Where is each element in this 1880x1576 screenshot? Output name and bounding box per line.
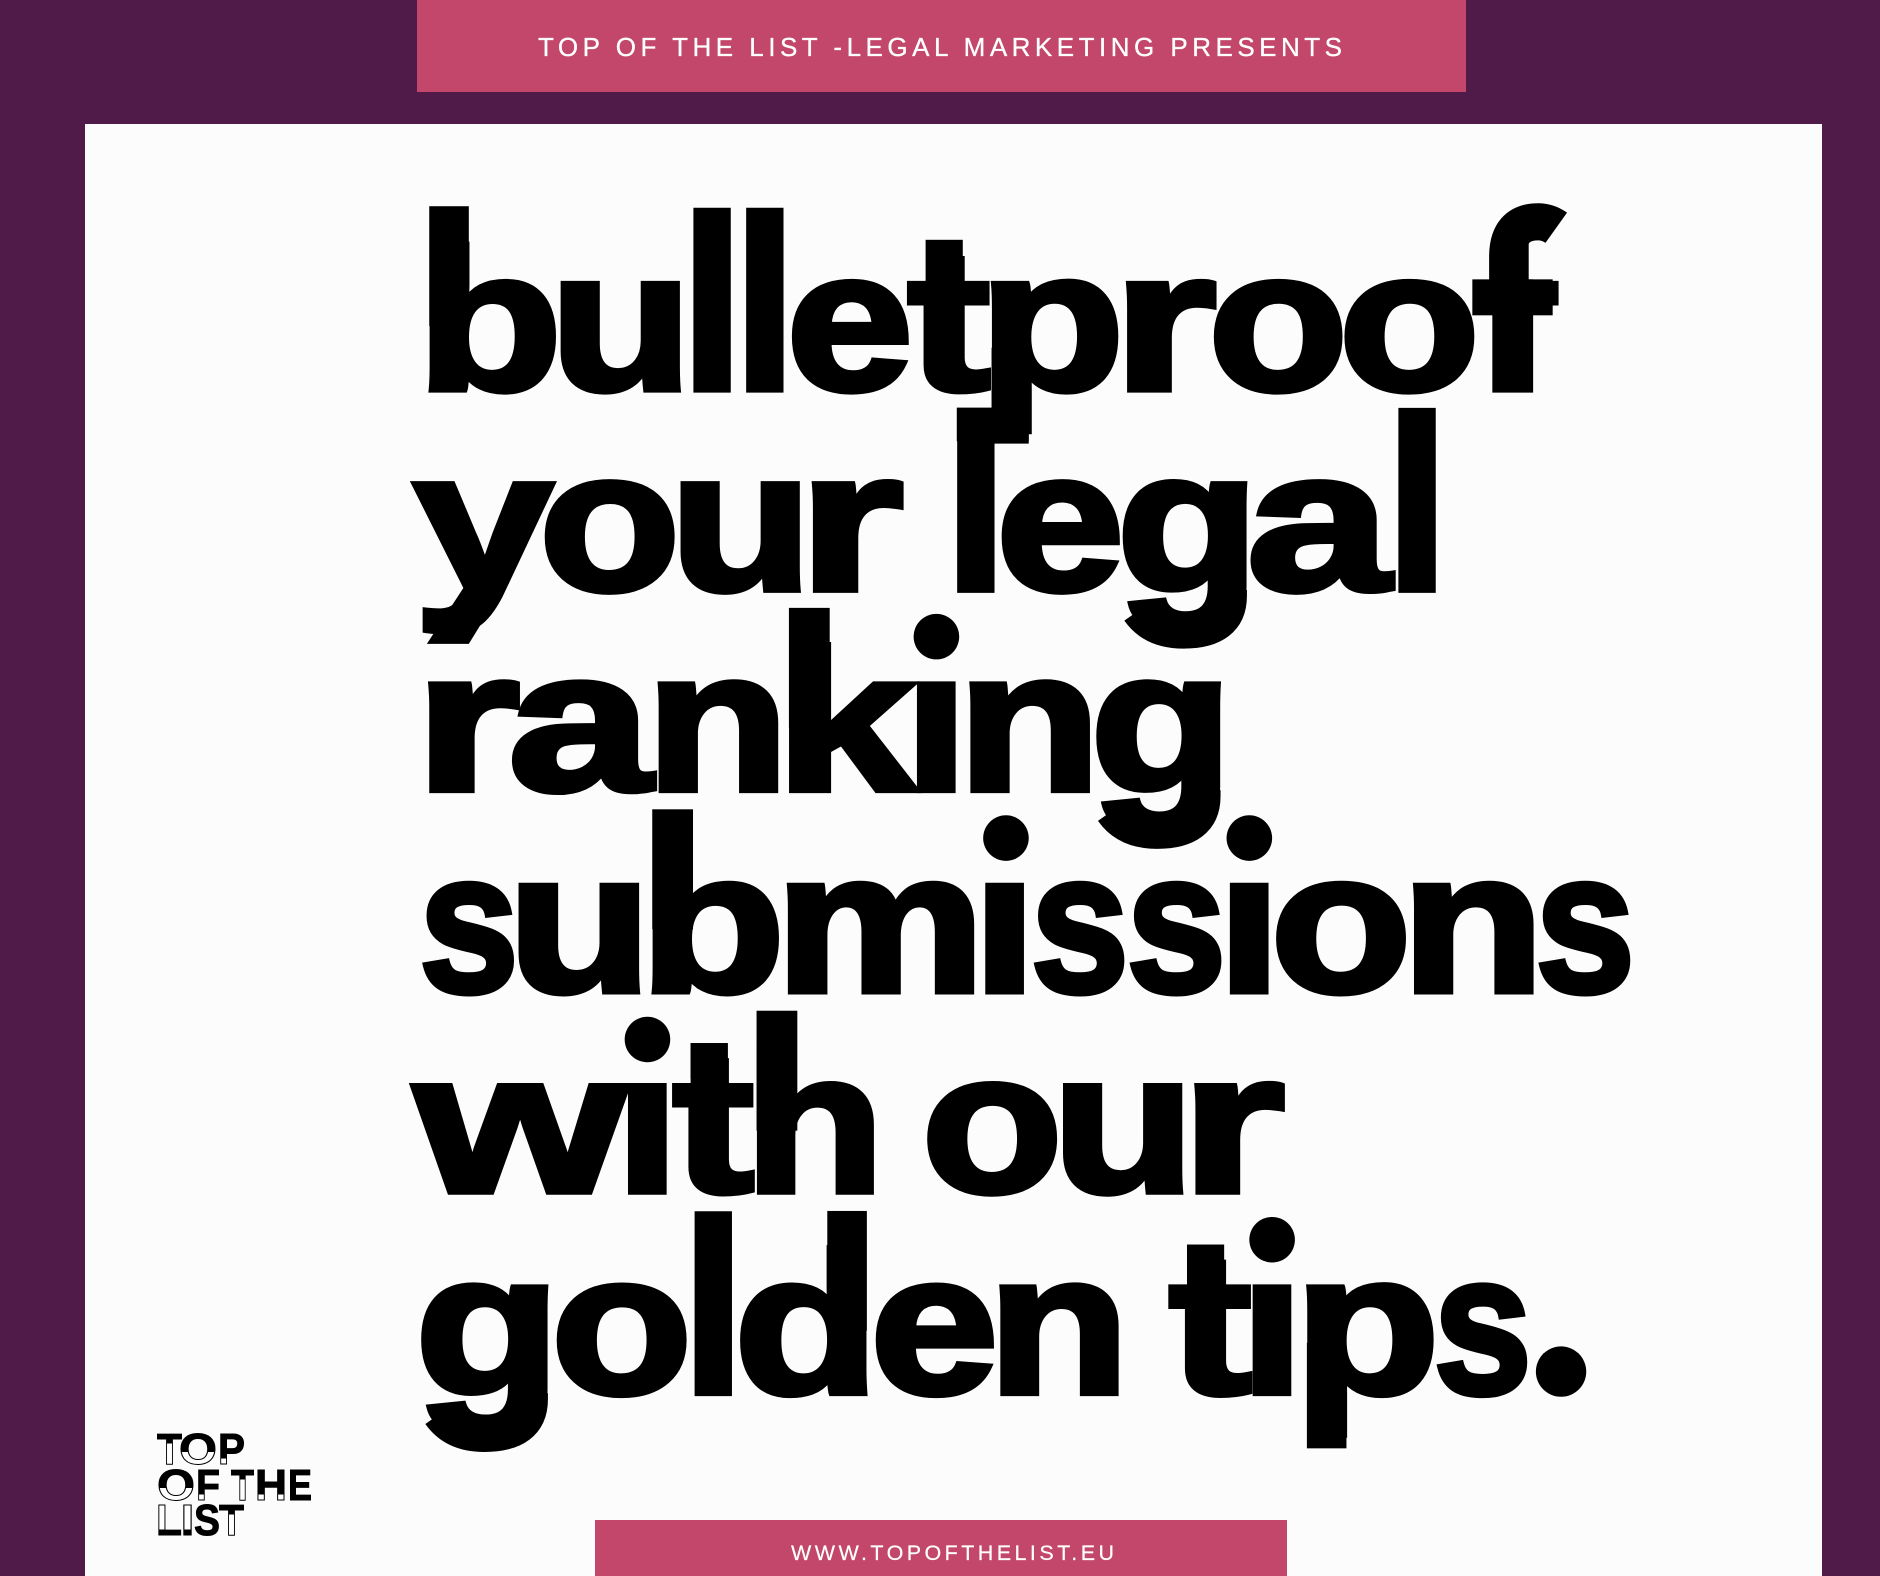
heading line: golden tips.: o <box>551 1213 692 1436</box>
heading line: ranking: n <box>646 610 789 833</box>
heading line: golden tips.: d <box>734 1213 880 1436</box>
heading line: submissions: b <box>640 812 785 1035</box>
heading line: your legal: e <box>996 410 1124 633</box>
heading line: ranking: n <box>958 610 1101 833</box>
heading line: bulletproof: o <box>1339 210 1480 433</box>
panel: top banner <box>417 0 1466 92</box>
heading line: submissions: i <box>1217 812 1281 1035</box>
heading line: submissions: n <box>1401 812 1545 1035</box>
heading line: bulletproof: b <box>417 210 562 433</box>
top banner text: TOP OF THE LIST -LEGAL MARKETING PRESENTS <box>538 32 1342 62</box>
logo line: LIST: S <box>194 1496 220 1545</box>
heading line: with our <box>413 1011 1285 1235</box>
heading line: your legal: a <box>1247 410 1392 633</box>
heading line: submissions: i <box>973 812 1037 1035</box>
panel: bottom banner <box>595 1520 1287 1576</box>
heading line: your legal: g <box>1117 410 1259 633</box>
logo line: OF THE: H <box>255 1461 287 1510</box>
heading line: ranking: a <box>508 610 654 833</box>
logo line: TOP: T <box>157 1425 182 1474</box>
heading line: golden tips.: s <box>1434 1213 1532 1436</box>
heading line: golden tips. <box>415 1170 1590 1448</box>
heading line: your legal: y <box>413 410 553 633</box>
heading line: bulletproof: e <box>786 210 913 433</box>
heading line: submissions: s <box>419 812 519 1035</box>
heading line: submissions <box>419 809 1635 1035</box>
logo line: LIST: T <box>219 1496 244 1545</box>
logo: Top of the List <box>156 1425 312 1545</box>
heading line: your legal <box>413 367 1449 644</box>
logo line: OF THE: T <box>231 1461 254 1510</box>
logo line: LIST: I <box>180 1496 194 1545</box>
heading line: bulletproof: l <box>733 167 797 443</box>
heading line: ranking: i <box>904 610 969 833</box>
heading line: with our: u <box>1052 1012 1195 1235</box>
logo line: TOP: O <box>179 1425 217 1474</box>
heading line: with our: o <box>922 1012 1063 1235</box>
heading line: with our: i <box>615 1012 680 1235</box>
heading line: your legal: l <box>944 367 1008 643</box>
heading line: submissions: o <box>1271 812 1412 1035</box>
logo line: OF THE: O <box>157 1461 195 1510</box>
heading line: golden tips.: p <box>1294 1213 1440 1436</box>
heading line: submissions: m <box>775 812 985 1035</box>
heading line: submissions: s <box>1031 812 1129 1035</box>
heading line: submissions: s <box>1127 812 1226 1035</box>
heading line: bulletproof: u <box>550 210 693 433</box>
heading line: bulletproof: o <box>1208 210 1348 433</box>
heading line: your legal: u <box>670 410 813 633</box>
heading line: ranking: r <box>414 610 520 833</box>
heading line: bulletproof: f <box>1473 210 1556 433</box>
logo line: OF THE: F <box>196 1461 220 1510</box>
heading line: golden tips.: e <box>870 1213 998 1436</box>
heading line: ranking <box>414 608 1233 833</box>
heading line: with our: t <box>673 1012 754 1235</box>
heading line: ranking: g <box>1090 610 1233 833</box>
heading line: golden tips.: . <box>1533 1206 1590 1429</box>
heading line: ranking: k <box>775 610 916 833</box>
heading line: with our: h <box>744 1012 885 1235</box>
heading line: your legal: r <box>798 410 904 633</box>
heading line: bulletproof: t <box>908 210 990 433</box>
heading line: bulletproof: r <box>1112 210 1217 433</box>
heading line: your legal: l <box>1385 367 1449 643</box>
heading line: bulletproof <box>417 167 1562 444</box>
heading line: bulletproof: p <box>979 210 1125 433</box>
heading line: your legal: o <box>539 410 680 633</box>
heading line: golden tips.: t <box>1169 1213 1252 1436</box>
heading line: with our: w <box>413 1012 628 1235</box>
bottom banner url: WWW.TOPOFTHELIST.EU <box>791 1541 1114 1565</box>
heading line: submissions: u <box>507 812 652 1035</box>
heading line: submissions: s <box>1535 812 1635 1035</box>
heading line: golden tips.: i <box>1240 1213 1304 1436</box>
heading line: golden tips.: l <box>681 1170 746 1446</box>
logo line: OF THE: E <box>288 1461 312 1510</box>
heading line: with our: r <box>1181 1012 1285 1235</box>
logo line: LIST: L <box>156 1496 182 1545</box>
heading line: golden tips.: g <box>415 1213 561 1436</box>
heading line: golden tips.: n <box>988 1213 1130 1436</box>
heading line: bulletproof: l <box>680 167 744 443</box>
logo line: TOP: P <box>218 1425 245 1474</box>
